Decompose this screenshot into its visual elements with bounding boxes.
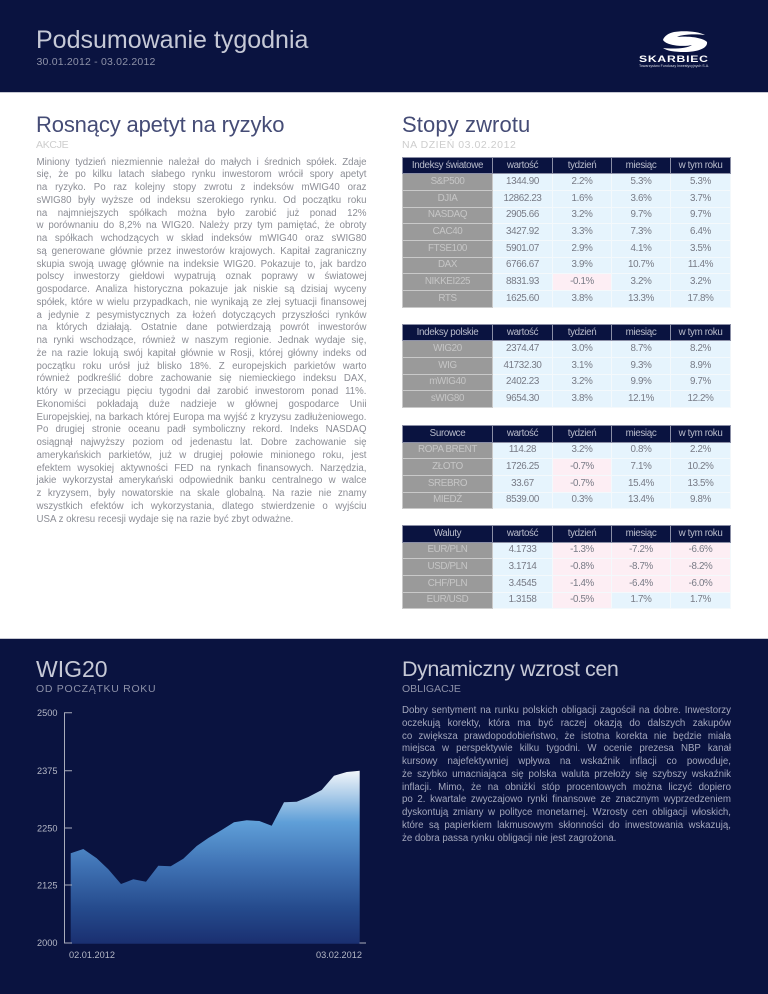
- y axis labels: 02.01.2012: [69, 950, 115, 960]
- table: surowce: 10.2%: [687, 461, 714, 472]
- table: waluty: 3.4545: [509, 578, 536, 589]
- footer band: [0, 638, 768, 994]
- table: indeksy światowe: 12862.23: [503, 193, 542, 204]
- area: index values: [71, 771, 360, 944]
- table: indeksy światowe: 5.3%: [631, 176, 651, 187]
- table: surowce: SREBRO: [428, 478, 467, 489]
- heading: Dynamiczny wzrost cen: Dynamiczny wzrost cen: [402, 657, 618, 681]
- table: indeksy polskie: 8.2%: [690, 343, 711, 354]
- article text: początku roku urósł już blisko 18%. Z europejskich parkietów warto: [36, 361, 366, 372]
- table: indeksy światowe: wartość: [507, 160, 538, 171]
- article text: że szybko umacniająca się polska waluta przełoży się szybszy wskaźnik: [402, 769, 731, 780]
- panel: akcje article: [36, 112, 366, 525]
- table: indeksy światowe: 7.3%: [631, 226, 651, 237]
- article text: sWIG80 były wyższe od indeksu szerokiego rynku. Od początku roku: [36, 195, 366, 206]
- table: surowce: -0.7%: [570, 478, 594, 489]
- y axis: [64, 713, 366, 943]
- article text: które są papierkiem lakmusowym skłonności do inwestowania wskazują,: [402, 820, 731, 831]
- table: surowce: 13.4%: [628, 494, 654, 505]
- table: indeksy światowe: 9.7%: [631, 209, 651, 220]
- area chart: [37, 708, 366, 960]
- article text: który w przeciągu pięciu tygodni dał zarobić inwestorom ponad 11%.: [36, 386, 366, 397]
- table: waluty: 3.1714: [509, 561, 536, 572]
- table: indeksy polskie: 9.7%: [690, 376, 711, 387]
- table: indeksy światowe: 3427.92: [506, 226, 539, 237]
- table: indeksy światowe: 3.9%: [572, 259, 592, 270]
- article text: miejsca w perspektywie kilku tygodni. W ocenie prezesa NBP kanał: [402, 743, 731, 754]
- table: indeksy światowe: 10.7%: [628, 259, 654, 270]
- article text: co zwiększa prawdopodobieństwo, że istotna korekta nie będzie miała: [402, 731, 731, 742]
- article text: inflacji. Mimo, że na obniżki stóp procentowych można liczyć dopiero: [402, 782, 731, 793]
- table: indeksy polskie: WIG: [438, 360, 457, 371]
- table: indeksy światowe: 1344.90: [506, 176, 539, 187]
- heading: WIG20: WIG20: [36, 656, 108, 682]
- table: indeksy światowe: 5901.07: [506, 243, 539, 254]
- article text: wszystkich efektów ich wykorzystania, dlatego stwierdzenie o wyjściu: [36, 501, 366, 512]
- article text: się, że po kilku latach słabego rynku inwestorom wrócił spory apetyt: [36, 169, 366, 180]
- table: waluty: -8.7%: [629, 561, 653, 572]
- panel: stopy zwrotu: [402, 112, 731, 609]
- table: waluty: -1.3%: [570, 544, 594, 555]
- table: waluty: 1.3158: [509, 594, 536, 605]
- table: indeksy światowe: S&P500: [431, 176, 464, 187]
- article text: na których działają. Ostatnie dane potwierdzają powrót inwestorów: [36, 322, 366, 333]
- y axis labels: [37, 708, 362, 960]
- logo tagline: Towarzystwo Funduszy Inwestycyjnych S.A.: [639, 64, 709, 68]
- table: waluty: -6.0%: [689, 578, 712, 589]
- table: indeksy polskie: WIG20: [433, 343, 462, 354]
- table: surowce: 13.5%: [687, 478, 714, 489]
- y axis labels: 2500: [37, 708, 57, 718]
- icon: S swoosh: [663, 31, 708, 52]
- table: waluty: 4.1733: [509, 544, 536, 555]
- table: waluty: tydzień: [568, 528, 596, 539]
- table: indeksy polskie: w tym roku: [679, 327, 722, 338]
- table: indeksy światowe: miesiąc: [626, 160, 656, 171]
- article text: Dobry sentyment na runku polskich obligacji zagościł na dobre. Inwestorzy: [402, 705, 731, 716]
- article text: na rynki wschodzące, również w naszym regionie. Jednak wydaje się,: [36, 335, 366, 346]
- table: waluty: 1.7%: [690, 594, 711, 605]
- table: waluty: EUR/USD: [427, 594, 468, 605]
- subheading: od początku roku: OD POCZĄTKU ROKU: [36, 682, 156, 694]
- table: surowce: tydzień: [568, 428, 596, 439]
- table: indeksy światowe: 3.7%: [690, 193, 711, 204]
- heading: Rosnący apetyt na ryzyko: Rosnący apetyt na ryzyko: [36, 112, 284, 137]
- table: surowce: 9.8%: [690, 494, 711, 505]
- table: indeksy światowe: 3.5%: [690, 243, 711, 254]
- y axis labels: 2000: [37, 938, 57, 948]
- table: indeksy światowe: 6766.67: [506, 259, 539, 270]
- table: surowce: ROPA BRENT: [418, 444, 477, 455]
- header band: [0, 0, 768, 93]
- table: waluty: Waluty: [434, 528, 461, 539]
- article text: a jedynie z pesymistycznych za łożeń dotyczących przyszłości rynków: [36, 310, 366, 321]
- table: surowce: 7.1%: [631, 461, 651, 472]
- panel: WIG20 chart: [36, 656, 366, 960]
- table: indeksy światowe: 13.3%: [628, 293, 654, 304]
- table: indeksy polskie: 8.9%: [690, 360, 711, 371]
- table: indeksy polskie: miesiąc: [626, 327, 656, 338]
- table: indeksy światowe: FTSE100: [428, 243, 467, 254]
- article text: [36, 157, 366, 525]
- article text: gospodarce. Analiza historyczna pokazuje jak niskie są dzisiaj wyceny: [36, 284, 366, 295]
- table: indeksy światowe: 2905.66: [506, 209, 539, 220]
- table: indeksy polskie: 3.0%: [572, 343, 592, 354]
- article text: z kryzysem, były nowatorskie na skale globalną. Na razie nie znamy: [36, 488, 366, 499]
- table: surowce: Surowce: [430, 428, 465, 439]
- table: indeksy polskie: 9.3%: [631, 360, 651, 371]
- table: indeksy światowe: [402, 157, 731, 308]
- table: surowce: -0.7%: [570, 461, 594, 472]
- table: indeksy światowe: tydzień: [568, 160, 596, 171]
- article text: na spółkach wchodzących w skład indeksów mWIG40 oraz sWIG80: [36, 233, 366, 244]
- table: indeksy światowe: 1.6%: [572, 193, 592, 204]
- article text: Po drugiej stronie oceanu padł symboliczny rekord. Indeks NASDAQ: [36, 424, 366, 435]
- y axis labels: 2250: [37, 824, 57, 834]
- table: indeksy światowe: 11.4%: [688, 259, 713, 270]
- article text: Miniony tydzień niezmiennie należał do małych i średnich spółek. Zdaje: [36, 157, 366, 168]
- table: waluty: -7.2%: [629, 544, 653, 555]
- table: indeksy polskie: mWIG40: [429, 376, 466, 387]
- article text: są generowane głównie przez inwestorów krajowych. Kapitał zagraniczny: [36, 246, 366, 257]
- table: surowce: 114.28: [509, 444, 536, 455]
- y axis labels: 03.02.2012: [316, 950, 362, 960]
- table: indeksy światowe: 8831.93: [506, 276, 539, 287]
- table: indeksy światowe: 9.7%: [690, 209, 711, 220]
- table: indeksy światowe: 17.8%: [687, 293, 714, 304]
- article text: jakie wykorzystał amerykański odpowiednik banku centralnego w walce: [36, 475, 366, 486]
- table: waluty: miesiąc: [626, 528, 656, 539]
- article text: polscy inwestorzy giełdowi wypatrują oznak poprawy w światowej: [36, 271, 366, 282]
- table: indeksy światowe: 3.2%: [690, 276, 711, 287]
- table: waluty: -1.4%: [570, 578, 594, 589]
- table: waluty: -0.5%: [570, 594, 594, 605]
- y axis labels: 2375: [37, 766, 57, 776]
- table: surowce: w tym roku: [679, 428, 722, 439]
- table: surowce: 1726.25: [506, 461, 539, 472]
- subheading: obligacje: OBLIGACJE: [402, 682, 461, 694]
- table: surowce: 2.2%: [690, 444, 711, 455]
- table: indeksy światowe: 3.8%: [572, 293, 592, 304]
- table: indeksy światowe: 3.2%: [631, 276, 651, 287]
- table: surowce: 0.8%: [631, 444, 651, 455]
- table: indeksy polskie: [402, 324, 731, 408]
- table: surowce: [402, 425, 731, 509]
- article text: osiągnął najwyższy poziom od jedenastu lat. Dobre zachowanie się: [36, 437, 366, 448]
- logo: Skarbiec: [639, 31, 709, 68]
- article text: [402, 705, 731, 844]
- table: surowce: miesiąc: [626, 428, 656, 439]
- article text: efektem wysokiej aktywności FED na rynkach finansowych. Narzędzia,: [36, 463, 366, 474]
- table: waluty: -6.4%: [629, 578, 653, 589]
- table: surowce: 8539.00: [506, 494, 539, 505]
- table: indeksy polskie: 2402.23: [506, 376, 539, 387]
- article text: w porównaniu do 8,2% na WIG20. Należy przy tym pamiętać, że obroty: [36, 220, 366, 231]
- logo wordmark: SKARBIEC: [639, 54, 709, 64]
- table: waluty: EUR/PLN: [427, 544, 468, 555]
- table: waluty: 1.7%: [631, 594, 651, 605]
- table: indeksy światowe: CAC40: [433, 226, 462, 237]
- article text: że na razie lokują swój kapitał głównie w Rosji, której główny indeks od: [36, 348, 366, 359]
- table: indeksy światowe: DAX: [438, 259, 457, 270]
- table: indeksy światowe: Indeksy światowe: [412, 160, 483, 171]
- table: indeksy polskie: sWIG80: [431, 393, 464, 404]
- article text: oczekują korekty, która ma być raczej okazją do dalszych zakupów: [402, 718, 731, 729]
- y axis labels: 2125: [37, 880, 57, 890]
- table: indeksy polskie: 3.2%: [572, 376, 592, 387]
- table: indeksy światowe: NIKKEI225: [425, 276, 470, 287]
- table: indeksy światowe: -0.1%: [570, 276, 594, 287]
- table: indeksy polskie: 8.7%: [631, 343, 651, 354]
- article text: spółek, które w wielu przypadkach, nie wynikają ze złej sytuacji finansowej: [36, 297, 366, 308]
- table: waluty: CHF/PLN: [428, 578, 467, 589]
- table: waluty: w tym roku: [679, 528, 722, 539]
- table: waluty: -8.2%: [689, 561, 712, 572]
- table: indeksy światowe: DJIA: [438, 193, 457, 204]
- article text: Ekonomiści pokładają duże nadzieje w głównej gospodarce Unii: [36, 399, 366, 410]
- table: indeksy światowe: RTS: [438, 293, 457, 304]
- heading: Stopy zwrotu: Stopy zwrotu: [402, 112, 530, 137]
- table: indeksy światowe: 3.3%: [572, 226, 592, 237]
- table: indeksy światowe: 1625.60: [506, 293, 539, 304]
- table: indeksy polskie: 2374.47: [506, 343, 539, 354]
- table: indeksy światowe: 2.2%: [572, 176, 592, 187]
- table: indeksy polskie: 3.8%: [572, 393, 592, 404]
- table: indeksy polskie: 12.1%: [628, 393, 654, 404]
- article text: na ryzyko. Po raz kolejny stopy zwrotu z indeksów mWIG40 oraz: [36, 182, 366, 193]
- table: surowce: 15.4%: [628, 478, 654, 489]
- table: indeksy polskie: 9.9%: [631, 376, 651, 387]
- table: indeksy światowe: 6.4%: [690, 226, 711, 237]
- table: indeksy polskie: Indeksy polskie: [417, 327, 478, 338]
- table: surowce: 3.2%: [572, 444, 592, 455]
- article text: na najmniejszych spółkach można było zarobić już ponad 12%: [36, 208, 366, 219]
- table: indeksy polskie: 9654.30: [506, 393, 539, 404]
- subheading: na dzień: NA DZIEŃ 03.02.2012: [402, 138, 516, 150]
- panel: obligacje article: [402, 657, 731, 844]
- subheading: AKCJE: AKCJE: [36, 138, 68, 150]
- article text: kursowy najefektywniej wpływa na wskaźnik inflacji co powoduje,: [402, 756, 731, 767]
- table: waluty: USD/PLN: [427, 561, 468, 572]
- report title: Podsumowanie tygodnia: [36, 26, 308, 54]
- table: surowce: 0.3%: [572, 494, 592, 505]
- table: waluty: wartość: [507, 528, 538, 539]
- report date range: 30.01.2012 - 03.02.2012: [36, 56, 156, 68]
- table: waluty: -6.6%: [689, 544, 712, 555]
- table: indeksy polskie: 12.2%: [687, 393, 714, 404]
- article text: dyskontują zmiany w polityce monetarnej. Wzrosty cen obligacji włoskich,: [402, 807, 731, 818]
- article text: skupia swoją uwagę głównie na indeksie WIG20. Pokazuje to, jak bardzo: [36, 259, 366, 270]
- table: waluty: [402, 525, 731, 609]
- table: surowce: wartość: [507, 428, 538, 439]
- table: indeksy światowe: 3.2%: [572, 209, 592, 220]
- table: indeksy polskie: 3.1%: [572, 360, 592, 371]
- table: surowce: ZŁOTO: [432, 461, 463, 472]
- table: indeksy światowe: 4.1%: [631, 243, 651, 254]
- table: indeksy światowe: 2.9%: [572, 243, 592, 254]
- table: indeksy polskie: 41732.30: [503, 360, 542, 371]
- table: indeksy polskie: wartość: [507, 327, 538, 338]
- article text: również podkreślić dobre zachowanie się niemieckiego indeksu DAX,: [36, 373, 366, 384]
- article text: po 2. kwartale zwyczajowo rynki finansowe ze znacznym wyprzedzeniem: [402, 794, 731, 805]
- table: surowce: 33.67: [511, 478, 534, 489]
- table: indeksy polskie: tydzień: [568, 327, 596, 338]
- article text: że dobra passa rynku obligacji nie jest zagrożona.: [402, 833, 616, 844]
- table: indeksy światowe: 5.3%: [690, 176, 711, 187]
- article text: USA z okresu recesji wydaje się na razie być zbyt odważne.: [36, 514, 293, 525]
- article text: Europejskiej, na barkach której Europa ma wyjść z kryzysu zadłużeniowego.: [36, 412, 366, 423]
- table: waluty: -0.8%: [570, 561, 594, 572]
- table: indeksy światowe: 3.6%: [631, 193, 651, 204]
- table: surowce: MIEDŹ: [433, 494, 462, 505]
- table: indeksy światowe: NASDAQ: [428, 209, 467, 220]
- article text: amerykańskich parkietów, już w drugiej połowie minionego roku, jest: [36, 450, 366, 461]
- table: indeksy światowe: w tym roku: [679, 160, 722, 171]
